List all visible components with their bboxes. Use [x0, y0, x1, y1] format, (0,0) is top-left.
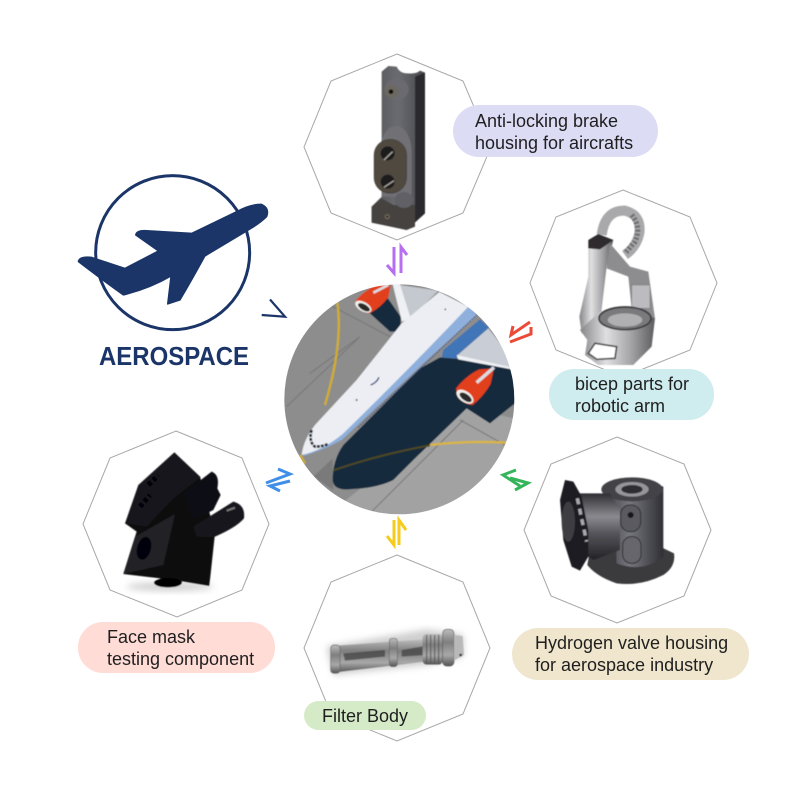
label: filter body [304, 701, 426, 730]
heading: AEROSPACE: AEROSPACE [99, 343, 249, 371]
central photo: airplane from above [280, 280, 520, 520]
label: bicep parts: bicep parts for [575, 374, 689, 394]
octagon frame [304, 54, 491, 240]
part: valve housing [560, 477, 674, 584]
octagon frame [524, 437, 711, 623]
part: filter body [327, 629, 464, 675]
arrow: logo pointer [262, 300, 285, 317]
label: hydrogen valve housing: for aerospace industry [535, 655, 713, 675]
panel: face mask testing component [78, 431, 275, 673]
part: brake housing [372, 66, 425, 230]
label: hydrogen valve housing [512, 628, 749, 680]
label: brake housing: housing for aircrafts [475, 133, 633, 153]
label: bicep parts [549, 369, 714, 420]
octagon frame [83, 431, 269, 617]
panel: filter body [304, 555, 490, 741]
arrow: blue double [266, 469, 290, 491]
label: face mask testing component [78, 622, 275, 673]
label: hydrogen valve housing: Hydrogen valve housing [535, 633, 728, 653]
arrow: red double [510, 322, 531, 342]
label: filter body: Filter Body [322, 706, 408, 726]
panel: hydrogen valve housing [512, 437, 749, 680]
part: robotic arm bicep [579, 211, 655, 365]
octagon frame [304, 555, 490, 741]
label: bicep parts: robotic arm [575, 396, 665, 416]
part: black block [123, 452, 244, 591]
arrow: yellow double [387, 520, 406, 545]
label: face mask testing component: testing component [107, 649, 254, 669]
arrow: green double [503, 470, 528, 490]
label: brake housing [453, 105, 658, 157]
logo: plane in circle [78, 176, 268, 330]
octagon frame [530, 190, 717, 377]
label: face mask testing component: Face mask [107, 627, 196, 647]
panel: anti-locking brake housing [304, 54, 658, 240]
panel: bicep parts [530, 190, 717, 420]
label: brake housing: Anti-locking brake [475, 111, 618, 131]
arrow: purple double [387, 247, 407, 273]
